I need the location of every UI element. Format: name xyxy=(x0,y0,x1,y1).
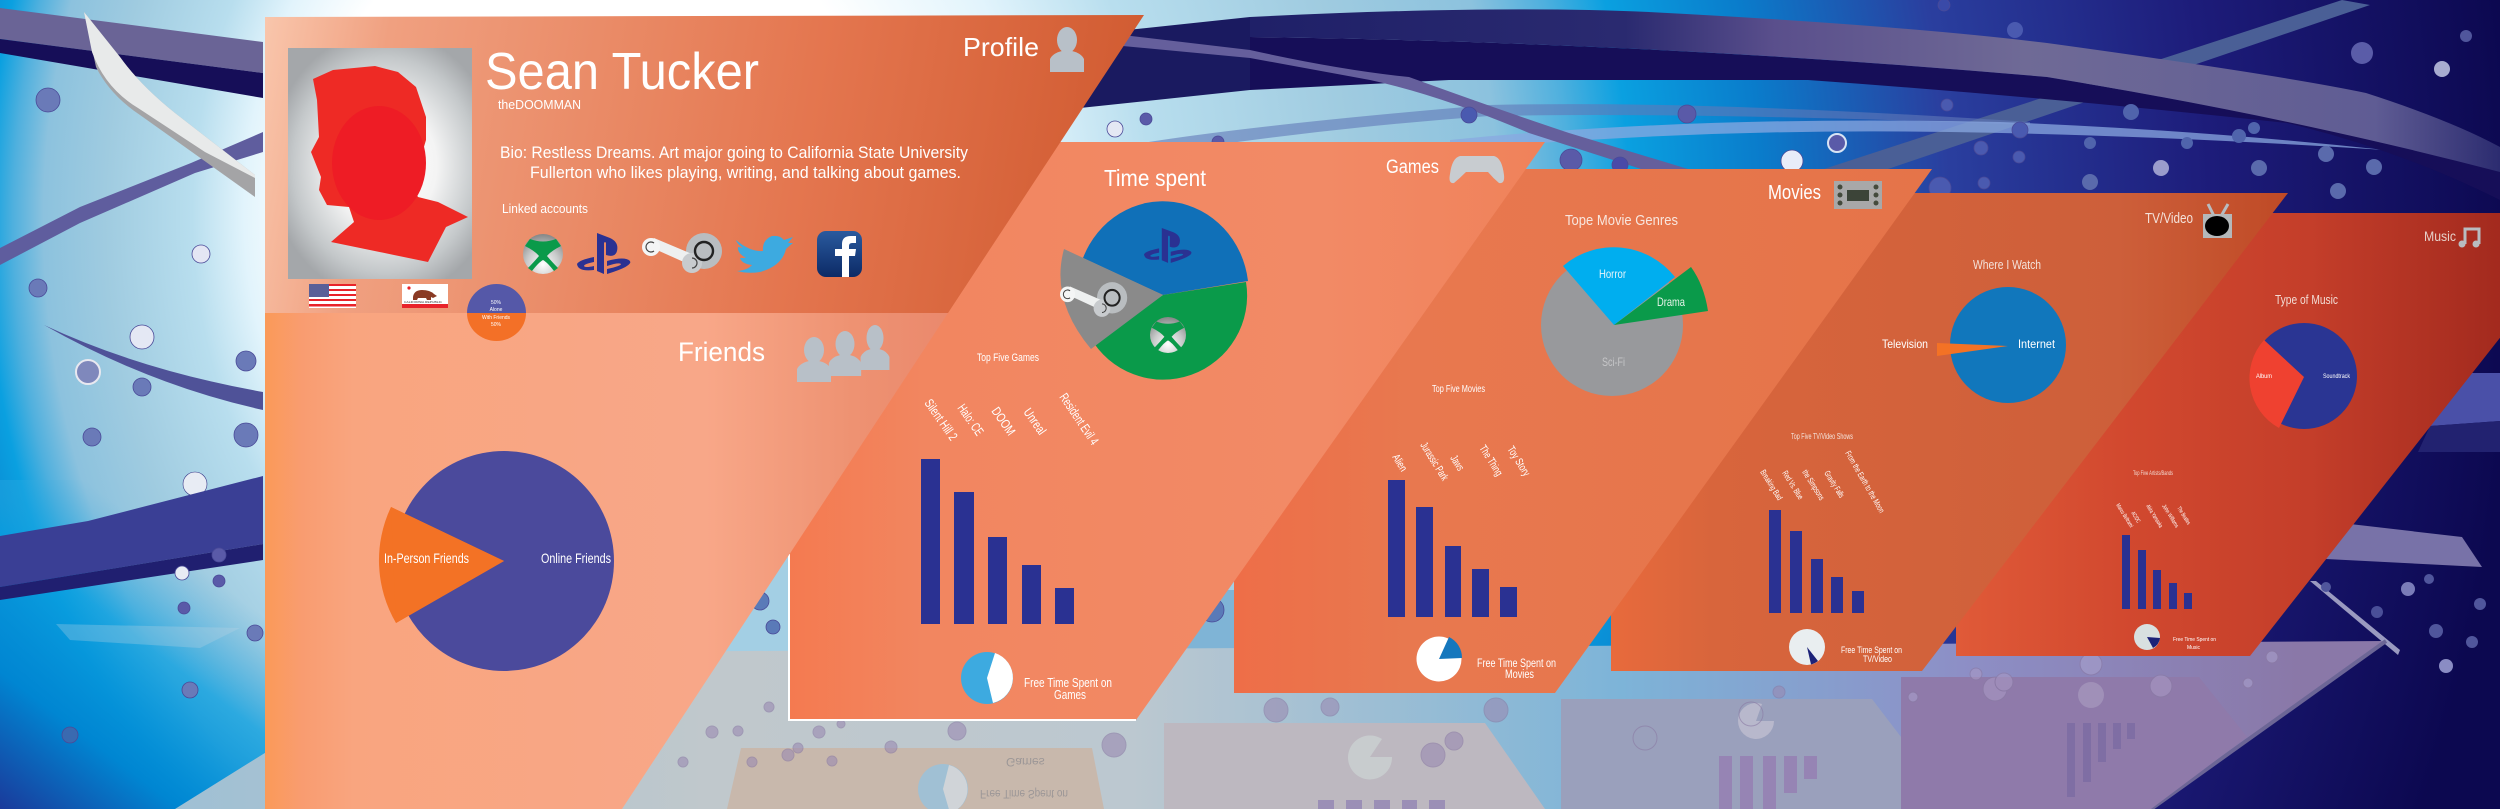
TV heading: TV/Video xyxy=(2145,210,2193,227)
game labels: Resident Evil 4 xyxy=(1057,390,1102,448)
background: deep blue lower-left corner xyxy=(0,480,265,809)
icon: PlayStation xyxy=(1144,228,1191,263)
pie: free time on games xyxy=(961,652,1013,704)
icon: television xyxy=(2203,204,2232,238)
free time on music label xyxy=(2173,637,2216,651)
movie labels: Jaws xyxy=(1447,453,1466,473)
icon: Xbox xyxy=(1150,317,1186,353)
time spent heading: Time spent xyxy=(1104,165,1207,191)
artist labels: John Williams xyxy=(2160,504,2179,529)
free time on TV label: Free Time Spent on xyxy=(1841,645,1902,655)
movie labels: Toy Story xyxy=(1504,444,1532,479)
bar chart: movies xyxy=(1388,480,1517,617)
panel: games xyxy=(789,142,1545,720)
icon: Facebook xyxy=(817,231,862,277)
movie labels: Jurassic Park xyxy=(1417,440,1451,483)
pie: type of music: Album xyxy=(2256,373,2272,380)
top five TV heading: Top Five TV/Video Shows xyxy=(1791,431,1853,441)
reflections of panels on floor: Games xyxy=(1006,755,1045,769)
top five artists heading: Top Five Artists/Bands xyxy=(2133,471,2173,477)
bubble behind left ribbon xyxy=(183,472,207,496)
icon: music note xyxy=(2458,229,2480,248)
reflections of panels on floor: Free Time Spent on xyxy=(980,787,1068,801)
artist labels: Marco Beltrami xyxy=(2114,503,2134,529)
artist labels: AC/DC xyxy=(2129,511,2141,525)
background patch: light blue behind games panel xyxy=(680,500,1240,670)
movies heading: Movies xyxy=(1768,182,1821,204)
pie: type of music xyxy=(2249,323,2357,429)
game labels xyxy=(922,390,1102,448)
game labels: Halo: CE xyxy=(955,401,987,439)
movie labels: Alien xyxy=(1389,452,1409,474)
panel: movies xyxy=(1234,169,1932,693)
TV show labels: From the Earth to the Moon xyxy=(1843,449,1887,515)
bar chart: TV shows xyxy=(1769,510,1864,613)
photo: silhouette portrait xyxy=(288,48,472,279)
pie: movie genres: Drama xyxy=(1657,295,1685,309)
bio: Fullerton who likes playing, writing, and talking about games. xyxy=(530,163,961,182)
TV show labels: Gravity Falls xyxy=(1822,469,1847,500)
free time on music label: Free Time Spent on xyxy=(2173,637,2216,643)
background patch: mid blue beside movies panel xyxy=(1100,590,1240,670)
icon: California flag: CALIFORNIA REPUBLIC xyxy=(404,300,443,304)
pie: where I watch xyxy=(1882,287,2066,403)
bio xyxy=(500,143,968,182)
pie: alone vs with friends: 50% xyxy=(491,300,502,306)
free time on games label: Free Time Spent on xyxy=(1024,675,1112,690)
panel white edge xyxy=(789,554,1136,720)
panel: friends xyxy=(265,313,948,809)
pie: where I watch: Television xyxy=(1882,337,1928,351)
pie: alone vs with friends xyxy=(467,284,526,341)
icon: film strip xyxy=(1834,181,1882,209)
music heading: Music xyxy=(2424,228,2456,244)
pie: alone vs with friends: Alone xyxy=(490,307,503,313)
TV show labels: Red Vs. Blue xyxy=(1780,469,1806,501)
icon: Steam xyxy=(642,233,722,273)
artist labels xyxy=(2114,503,2191,529)
free time on movies label xyxy=(1477,658,1556,681)
bar chart: artists xyxy=(2122,535,2192,609)
pie: free time on movies xyxy=(1416,636,1462,682)
username: theDOOMMAN xyxy=(498,97,581,112)
pie: time spent xyxy=(1060,201,1248,380)
panel: TV/video xyxy=(1611,193,2288,671)
movie labels xyxy=(1389,440,1532,483)
free time on games label: Games xyxy=(1054,687,1086,702)
panel: profile xyxy=(265,15,1144,341)
icon: California flag xyxy=(402,284,448,308)
icon: three people xyxy=(797,325,889,382)
TV show labels: the Simpsons xyxy=(1800,468,1827,502)
where I watch heading: Where I Watch xyxy=(1973,257,2041,272)
free time on games label xyxy=(1024,675,1112,702)
icon: Xbox xyxy=(523,234,563,274)
floor edge xyxy=(2151,641,2386,809)
reflections of panels on floor xyxy=(678,651,2278,809)
free time on music label: Music xyxy=(2187,645,2200,651)
pie: movie genres: Sci-Fi xyxy=(1602,355,1625,369)
pie: alone vs with friends: With Friends xyxy=(482,315,511,321)
icon: Twitter xyxy=(736,236,793,273)
pie: movie genres: Horror xyxy=(1599,267,1626,281)
free time on TV label xyxy=(1841,645,1902,664)
icon: controller xyxy=(1450,156,1504,183)
icon: Steam xyxy=(1060,282,1127,317)
type of music heading: Type of Music xyxy=(2275,292,2338,307)
top movie genres heading: Tope Movie Genres xyxy=(1565,212,1678,229)
profile heading: Profile xyxy=(963,32,1039,62)
movie labels: The Thing xyxy=(1476,443,1505,478)
free time on movies label: Movies xyxy=(1505,669,1534,681)
free time on movies label: Free Time Spent on xyxy=(1477,658,1556,670)
bar chart: games xyxy=(921,459,1074,624)
name: Sean Tucker xyxy=(485,43,759,101)
game labels: Unreal xyxy=(1021,405,1050,438)
pie: movie genres xyxy=(1541,247,1708,396)
icon: US flag xyxy=(309,284,356,308)
pie: free time on music xyxy=(2134,624,2160,650)
top five games heading: Top Five Games xyxy=(977,352,1039,364)
linked accounts label: Linked accounts xyxy=(502,201,588,216)
panel: music xyxy=(1956,213,2500,656)
pie: friends xyxy=(379,451,614,671)
TV show labels: Breaking Bad xyxy=(1758,468,1785,502)
pie: friends: In-Person Friends xyxy=(384,550,469,566)
TV show labels xyxy=(1758,449,1887,515)
artist labels: Akira Yamaoka xyxy=(2144,504,2163,529)
top five movies heading: Top Five Movies xyxy=(1432,384,1485,395)
friends heading: Friends xyxy=(678,337,765,367)
games heading: Games xyxy=(1386,157,1439,178)
pie: alone vs with friends: 50% xyxy=(491,322,502,328)
free time on TV label: TV/Video xyxy=(1863,654,1892,664)
pie: type of music: Soundtrack xyxy=(2323,373,2351,380)
game labels: DOOM xyxy=(989,404,1019,438)
icon: person xyxy=(1050,27,1084,72)
reflective floor plane xyxy=(175,641,2386,809)
bio: Bio: Restless Dreams. Art major going to California State University xyxy=(500,143,968,162)
pie: friends: Online Friends xyxy=(541,550,611,566)
icon: PlayStation xyxy=(577,233,630,274)
icon: white blade xyxy=(84,12,255,197)
artist labels: The Beatles xyxy=(2175,506,2191,526)
pie: where I watch: Internet xyxy=(2018,337,2056,351)
game labels: Silent Hill 2 xyxy=(922,396,961,443)
pie: free time on TV xyxy=(1789,629,1825,665)
